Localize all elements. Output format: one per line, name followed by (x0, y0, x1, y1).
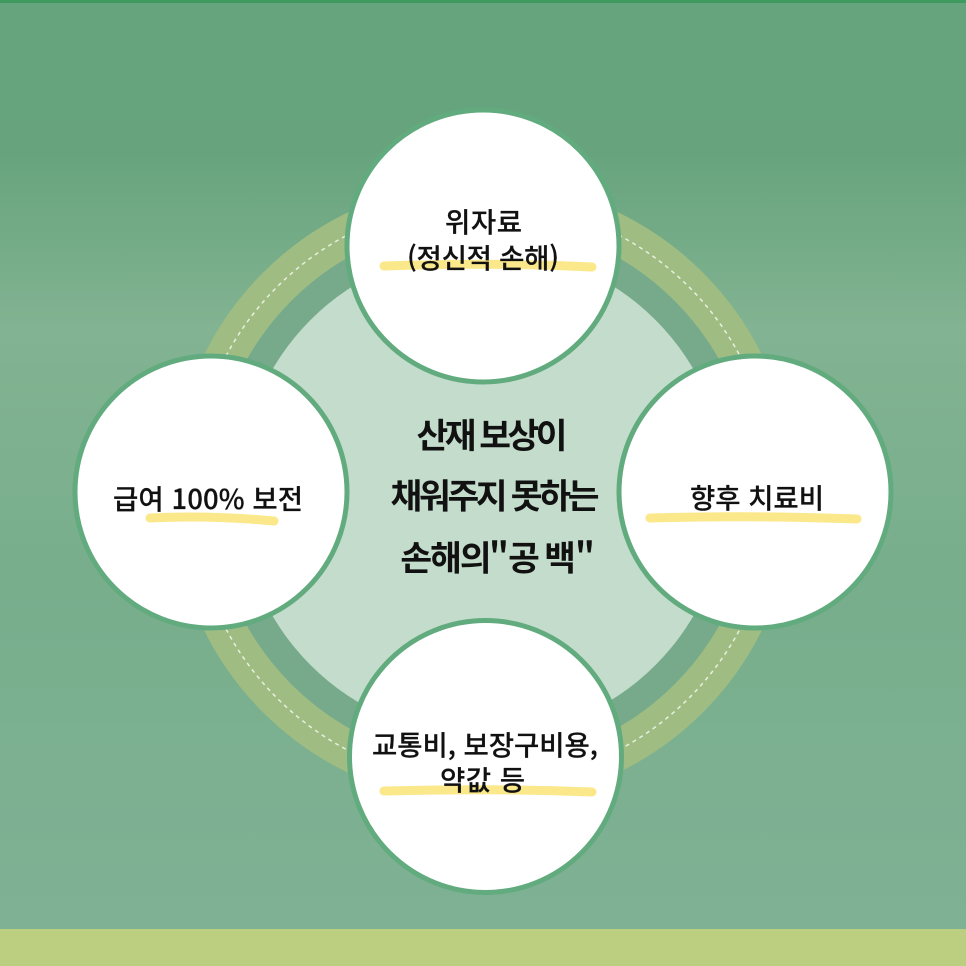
label: bottom: 교통비, 보장구비용, (372, 723, 598, 763)
circle: right (619, 356, 891, 628)
center heading (390, 408, 600, 580)
center heading: 백 (544, 530, 574, 580)
label: bottom (372, 723, 598, 798)
highlight: top (384, 264, 592, 267)
label: bottom: 약값 등 (440, 758, 525, 798)
center disc (239, 248, 727, 736)
highlight: right (650, 517, 857, 519)
center heading: 공 (508, 530, 539, 580)
circle: top (347, 110, 619, 382)
center heading: " (575, 530, 593, 580)
center heading: " (489, 530, 507, 580)
circle: bottom (350, 620, 622, 892)
highlight: bottom (384, 790, 592, 792)
bottom bar (0, 929, 966, 966)
label: top: 위자료 (445, 200, 522, 240)
outer ring (192, 202, 774, 784)
label: top: (정신적 손해) (407, 236, 559, 276)
center heading: 산재 보상이 (416, 408, 568, 458)
top bar (0, 0, 966, 3)
center heading: 채워주지 못하는 (390, 468, 600, 518)
circle: left (75, 356, 347, 628)
label: left: 급여 100% 보전 (113, 477, 303, 517)
center heading: 손해의 (400, 530, 490, 580)
ring gap (212, 222, 754, 764)
highlight: left (150, 517, 274, 521)
label: top (407, 200, 559, 276)
label: right: 향후 치료비 (690, 476, 824, 516)
